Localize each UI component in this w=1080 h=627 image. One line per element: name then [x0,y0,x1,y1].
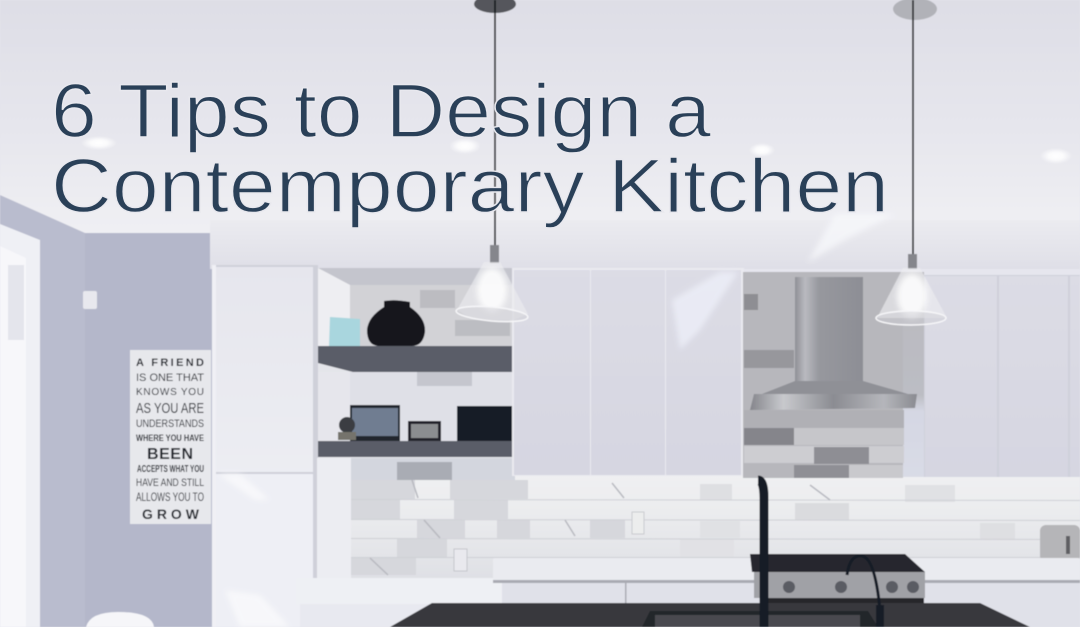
wall sign: A FRIEND [136,357,204,369]
hood canopy [762,381,908,394]
wall sign: IS ONE THAT [136,372,204,384]
wall sign [130,350,211,524]
shelf top [318,346,513,372]
hood chimney [795,277,863,382]
upper cabinets right [924,275,1080,477]
sink [642,611,878,627]
shelf items [338,405,512,441]
range hood niche [743,272,917,478]
wall sign: BEEN [147,446,193,463]
wall sign: ACCEPTS WHAT YOU [137,464,204,475]
wall sign: GROW [142,506,200,522]
window frame [0,224,40,627]
title [51,69,889,229]
ceiling [0,0,1080,236]
open shelving [317,268,514,586]
title line two: Contemporary Kitchen [51,144,889,229]
wall sign: HAVE AND STILL [136,477,204,489]
stool [86,612,154,627]
island countertop [390,603,1030,627]
black vase [367,300,425,346]
wall sign: ALLOWS YOU TO [136,490,204,504]
title line one: 6 Tips to Design a [51,69,712,154]
soffit [210,220,1080,269]
wall sign: KNOWS YOU [136,387,204,398]
wall sign: UNDERSTANDS [136,418,204,430]
ceiling lights [81,136,1072,164]
pendant lamp right [876,0,947,325]
right counter [493,558,1080,627]
gas range [750,554,925,603]
hood band [750,394,917,410]
backsplash [350,456,1080,578]
wall thermostat [83,291,97,309]
upper cabinets centre [512,268,744,476]
left counter [296,578,502,627]
pale side panel [903,272,924,477]
left wall [0,195,212,627]
toaster [1040,525,1080,562]
shelf bottom [318,441,513,457]
wall sign: WHERE YOU HAVE [136,433,204,443]
teal box [329,317,360,346]
tall cabinets [212,265,318,627]
faucet [758,480,880,627]
wall sign: AS YOU ARE [136,400,204,417]
pendant lamp left [456,0,528,324]
